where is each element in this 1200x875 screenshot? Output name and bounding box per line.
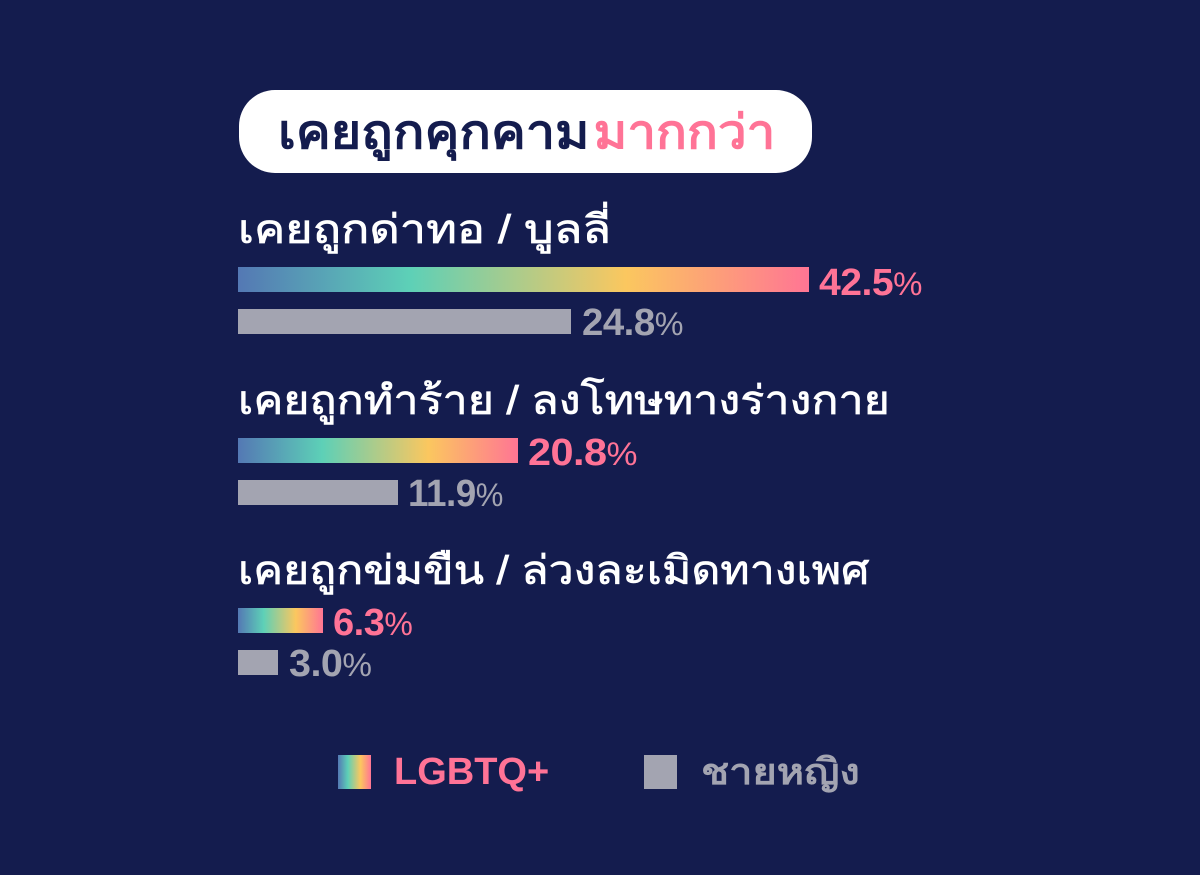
title text: มากกว่า: [593, 105, 775, 158]
bar: verbal men and women: [238, 309, 571, 334]
bar: sexual men and women: [238, 650, 278, 675]
title text: [278, 105, 775, 161]
title pill: [239, 90, 812, 173]
value: 6.3%: 6.3%: [333, 602, 412, 644]
title text: เคยถูกคุกคาม: [278, 105, 590, 158]
value: 24.8%: 24.8%: [582, 302, 683, 344]
legend label: LGBTQ+: LGBTQ+: [394, 751, 549, 793]
heading: verbal bullying: เคยถูกด่าทอ / บูลลี่: [238, 208, 611, 252]
bar: physical LGBTQ+: [238, 438, 518, 463]
bar: physical men and women: [238, 480, 398, 505]
legend label: men and women: ชายหญิง: [701, 751, 860, 792]
bar: verbal LGBTQ+: [238, 267, 809, 292]
value: 3.0%: 3.0%: [289, 643, 371, 685]
bar: sexual LGBTQ+: [238, 608, 323, 633]
legend swatch: men and women: [644, 755, 677, 789]
value: 20.8%: 20.8%: [528, 432, 637, 474]
value: 42.5%: 42.5%: [819, 262, 922, 304]
value: 11.9%: 11.9%: [408, 473, 503, 515]
legend swatch: LGBTQ+: [338, 755, 371, 789]
heading: sexual violation: เคยถูกข่มขืน / ล่วงละเมิดทางเพศ: [238, 549, 869, 593]
heading: physical abuse: เคยถูกทำร้าย / ลงโทษทางร่างกาย: [238, 379, 890, 423]
